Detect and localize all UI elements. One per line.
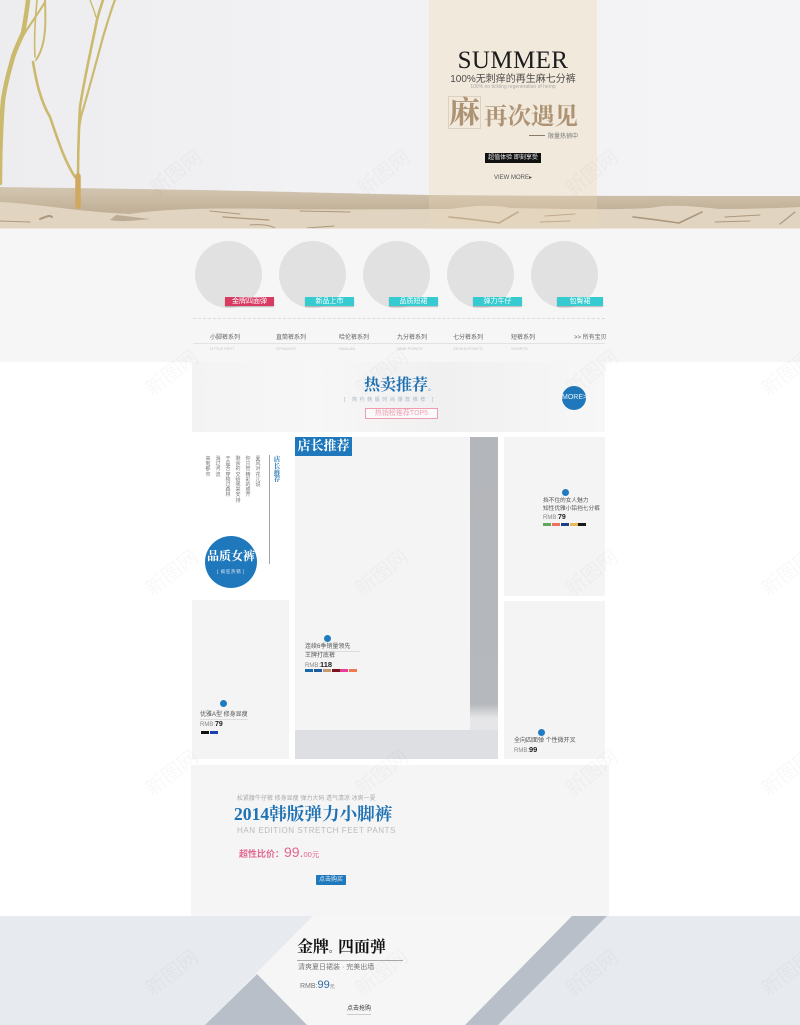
- nav english: seven points: SEVEN POINTS: [453, 346, 483, 351]
- play icon: [324, 635, 331, 642]
- subtitle: hemp pants: 100%无刺痒的再生麻七分裤: [450, 74, 576, 85]
- tag: 包臀裙: 包臀裙: [570, 298, 590, 305]
- product name: 优雅A型 修身显瘦: [200, 712, 248, 718]
- product card: four-way stretch: [504, 601, 605, 759]
- line and tagline: [529, 135, 545, 136]
- colour swatches: [201, 731, 218, 734]
- vertical rule: [269, 455, 270, 564]
- bracket subtitle: [ 简约韩版时尚爆款推荐 ]: [344, 397, 436, 403]
- series nav: 七分裤系列: 七分裤系列: [453, 335, 483, 341]
- hero banner: [0, 0, 800, 229]
- watermarks: 新图网: [558, 141, 623, 201]
- heading: SUMMER: SUMMER: [458, 47, 568, 74]
- badge: 品质女裤: [205, 536, 257, 588]
- watermarks: 新图网: [558, 341, 623, 401]
- character box: 麻: 麻: [449, 95, 480, 130]
- cream text panel: [429, 0, 597, 229]
- grey diagonal band: [465, 916, 607, 1025]
- price: RMB:79: [543, 514, 566, 521]
- buy link: 点击抢购: [347, 1006, 371, 1012]
- poem column 1: 夏风对花儿说: [255, 456, 260, 488]
- watermarks: 新图网: [142, 141, 207, 201]
- heading: 金牌四面弹: 金牌。四面弹: [297, 939, 386, 956]
- buy button: [316, 875, 346, 885]
- feature list: 松紧腰牛仔裤 修身显瘦 弹力大码 透气清凉 冰爽一夏: [237, 796, 376, 802]
- watermarks: 新图网: [558, 741, 623, 801]
- category circle 4: [447, 241, 514, 308]
- watermarks: 新图网: [348, 541, 413, 601]
- tag: 弹力牛仔: [473, 297, 522, 306]
- watermarks: 新图网: [348, 341, 413, 401]
- bottom section background: [0, 916, 800, 1025]
- small english subtitle: 100% no tickling regeneration of hemp: [470, 84, 556, 90]
- poem column 3: 剩余的交给我来安排: [235, 456, 240, 504]
- heading: 2014韩版弹力小脚裤: 2014韩版弹力小脚裤: [234, 804, 392, 824]
- nav english: straight: STRAIGHT: [276, 346, 296, 351]
- price: RMB:79: [200, 721, 223, 728]
- product card: slim fit: [504, 437, 605, 596]
- poem column 4: 于是吾穿梭过森林: [225, 456, 230, 498]
- play icon: [538, 729, 545, 736]
- pink label: top 5: [365, 408, 438, 419]
- tag: 新品上市: [305, 297, 354, 306]
- product name line 2: 王牌打底裤: [305, 653, 335, 659]
- series nav: 直筒裤系列: 直筒裤系列: [276, 335, 306, 341]
- tag: 新品上市: 新品上市: [316, 298, 344, 305]
- tag: 弹力牛仔: 弹力牛仔: [484, 298, 512, 305]
- poem column 2: 你只管精彩的盛开: [245, 456, 250, 498]
- pink label: top 5: 热销榜推荐TOP5: [375, 410, 428, 417]
- view more link: VIEW MORE▸: [494, 175, 532, 181]
- price: RMB:99: [514, 745, 537, 754]
- series nav: 九分裤系列: 九分裤系列: [397, 335, 427, 341]
- more button: [562, 386, 586, 410]
- limited sale note: 限量热销中: [548, 134, 578, 140]
- ribbon: 店长推荐: 店长推荐: [297, 438, 350, 453]
- promo banner: stretch feet pants: [191, 765, 609, 916]
- buy button: 点击购买: [319, 877, 343, 883]
- series nav: 小脚裤系列: 小脚裤系列: [210, 335, 240, 341]
- category circle 5: [531, 241, 598, 308]
- product card: A-line fit: [192, 600, 289, 759]
- category circle 2: [279, 241, 346, 308]
- category section: [0, 229, 800, 362]
- vertical title: 店长推荐: 店长推荐: [274, 456, 280, 483]
- tag: 品质短裙: 品质短裙: [400, 298, 428, 305]
- category circle 1: [195, 241, 262, 308]
- grey triangle: [205, 974, 307, 1025]
- poem column 6: 来到都市: [205, 456, 210, 478]
- tag: 品质短裙: [389, 297, 438, 306]
- nav english: nine points: NINE POINTS: [397, 346, 423, 351]
- watermarks: 新图网: [138, 941, 203, 1001]
- play icon: [220, 700, 227, 707]
- hero photo: trees and linen cloth: [0, 0, 800, 229]
- price: RMB 99: RMB:99元: [300, 979, 335, 991]
- buy link: [347, 1005, 371, 1015]
- link: all items: >> 所有宝贝: [574, 335, 607, 341]
- nav english: shorts: SHORTS: [511, 346, 528, 351]
- watermarks: 新图网: [348, 741, 413, 801]
- centre light panel: [205, 916, 572, 1025]
- series nav: 哈伦裤系列: 哈伦裤系列: [339, 335, 369, 341]
- badge title: 品质女裤: [207, 549, 255, 563]
- black offer label: [485, 153, 541, 163]
- tag: 金牌四面弹: [225, 297, 274, 306]
- product name line 1: 连续6季销量领先: [305, 644, 350, 650]
- light product area: [295, 437, 470, 730]
- english heading: HAN EDITION STRETCH FEET PANTS: [237, 826, 396, 835]
- headline: 再次遇见: 再次遇见: [484, 104, 578, 130]
- watermarks: 新图网: [138, 341, 203, 401]
- play icon: [562, 489, 569, 496]
- black offer label: 超值体验 即刻享受: [488, 155, 538, 161]
- nav english: little feet: LITTLE FEET: [210, 346, 234, 351]
- heading: 热卖推荐: 热卖推荐。: [364, 377, 436, 394]
- hot sale banner: [192, 362, 605, 432]
- category circle 3: [363, 241, 430, 308]
- tag: 金牌四面弹: 金牌四面弹: [232, 298, 267, 305]
- product name line 2: 知性优雅小铅裆七分裤: [543, 506, 600, 512]
- watermarks: 新图网: [138, 741, 203, 801]
- colour swatches: [305, 669, 357, 672]
- badge subtitle: [ 疯狂热销 ]: [217, 569, 245, 574]
- subtitle: 清爽夏日裙装 · 完美出墙: [298, 964, 374, 971]
- watermarks: 新图网: [558, 941, 623, 1001]
- watermarks: 新图网: [348, 941, 413, 1001]
- nav english: harlan: HARLAN: [339, 346, 355, 351]
- watermarks: 新图网: [350, 141, 415, 201]
- watermarks: 新图网: [138, 541, 203, 601]
- featured product panel: [295, 437, 498, 759]
- price: 超性比价：99.00元: [239, 844, 319, 860]
- product name: 全向四面弹 个性微开叉: [514, 738, 576, 744]
- price: RMB:118: [305, 660, 332, 669]
- tag: 包臀裙: [557, 297, 603, 306]
- series nav: 短裤系列: 短裤系列: [511, 335, 535, 341]
- left column: shop recommendation text: [205, 455, 280, 588]
- grey side strip: [470, 437, 498, 730]
- more button: MORE>: [562, 394, 587, 401]
- watermarks: 新图网: [558, 541, 623, 601]
- poem column 5: 淌过河流: [215, 456, 220, 478]
- colour swatches: [543, 523, 586, 526]
- product name line 1: 挡不住的女人魅力: [543, 498, 588, 504]
